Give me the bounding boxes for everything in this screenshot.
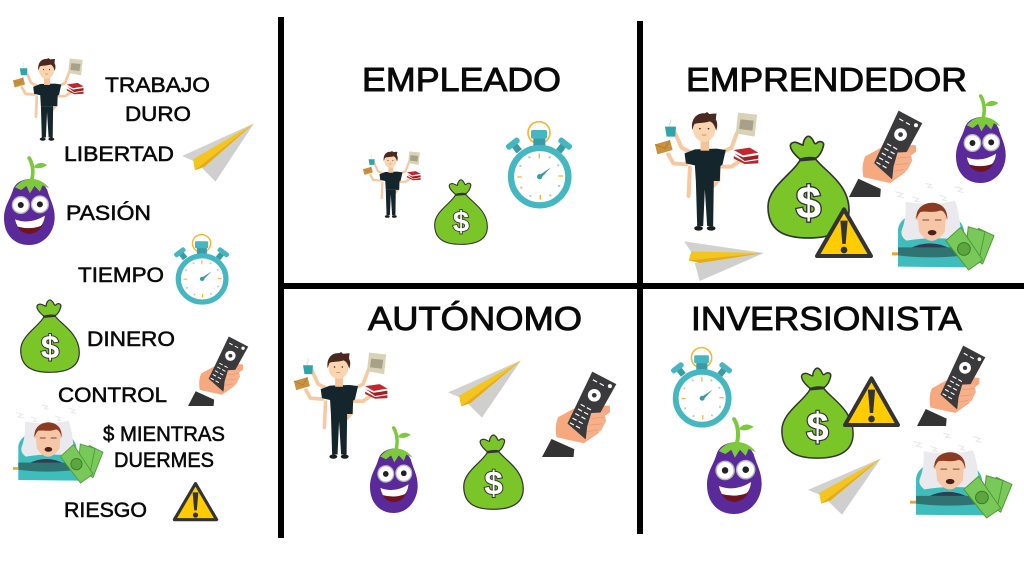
panel: legend [4, 58, 254, 522]
heading: empleado: EMPLEADO [362, 61, 561, 98]
icon: eggplant [707, 419, 762, 514]
icon: money bag [782, 368, 853, 458]
panel: autonomo [294, 300, 616, 513]
label: dinero mientras duermes: DUERMES [114, 449, 214, 472]
heading: inversionista: INVERSIONISTA [691, 300, 962, 337]
icon: sleeping person with money [910, 433, 1012, 518]
icon: paper plane [808, 458, 881, 515]
label: trabajo duro: TRABAJO [105, 74, 210, 97]
icon: paper plane [182, 123, 254, 182]
panel: inversionista [670, 300, 1012, 518]
icon: money bag [21, 300, 79, 372]
icon: remote control [188, 337, 248, 406]
label: dinero mientras duermes: $ MIENTRAS [103, 423, 225, 446]
icon: money bag [435, 180, 487, 244]
panel: emprendedor [655, 61, 1006, 281]
icon: hard-working man [363, 151, 421, 218]
label: dinero mientras duermes [103, 423, 225, 472]
icon: sleeping person with money [13, 405, 103, 483]
heading: emprendedor: EMPRENDEDOR [686, 61, 967, 98]
icon: warning sign [817, 209, 871, 256]
icon: warning sign [845, 378, 898, 425]
label: control: CONTROL [58, 384, 167, 407]
icon: stopwatch [173, 235, 230, 302]
icon: money bag [768, 136, 849, 238]
icon: eggplant [956, 96, 1006, 183]
icon: remote control [542, 372, 616, 457]
label: riesgo: RIESGO [64, 499, 147, 522]
icon: eggplant [4, 158, 55, 245]
icon: remote control [849, 111, 922, 197]
icon: hard-working man [294, 352, 387, 459]
icon: eggplant [370, 428, 418, 513]
icon: money bag [464, 435, 523, 509]
icon: warning sign [174, 484, 217, 520]
icon: paper plane [448, 360, 521, 418]
icon: stopwatch [505, 122, 573, 205]
icon: remote control [917, 346, 985, 426]
label: dinero: DINERO [87, 328, 175, 351]
label: pasion: PASIÓN [66, 202, 151, 225]
icon: stopwatch [670, 348, 733, 425]
icon: hard-working man [13, 58, 84, 141]
label: libertad: LIBERTAD [64, 143, 174, 166]
heading: autonomo: AUTÓNOMO [368, 300, 582, 337]
panel: empleado [362, 61, 573, 244]
icon: sleeping person with money [892, 183, 994, 270]
icon: paper plane [684, 241, 764, 281]
label: trabajo duro: DURO [125, 103, 191, 126]
label: tiempo: TIEMPO [78, 264, 164, 287]
label: trabajo duro [105, 74, 210, 126]
icon: hard-working man [655, 112, 758, 231]
